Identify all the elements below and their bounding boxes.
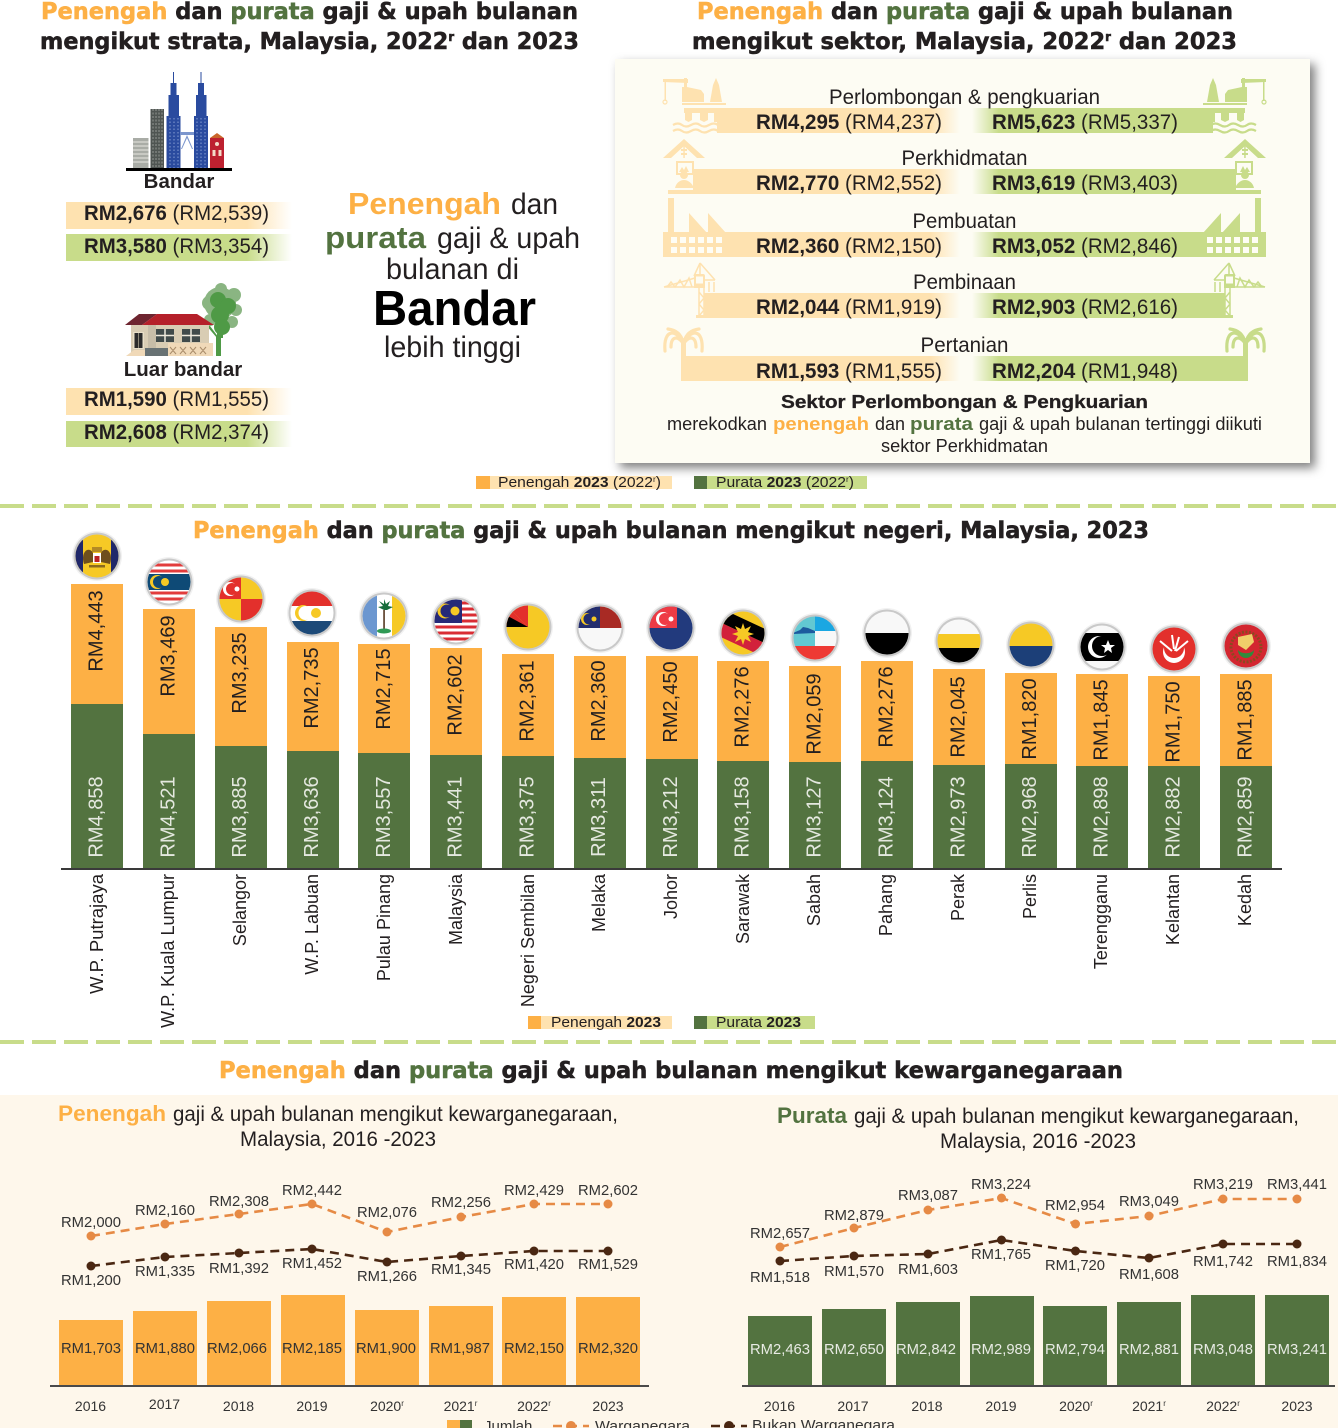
bar values: RM2,066 xyxy=(207,1341,267,1357)
callout: Bandar lebih tinggi: purata xyxy=(325,220,427,255)
row: Pembinaan: RM2,044 (RM1,919) xyxy=(756,296,942,319)
line labels: RM1,345 xyxy=(431,1262,491,1278)
years: r xyxy=(1163,1399,1166,1408)
values: penengah: RM2,450 xyxy=(660,661,682,743)
category labels xyxy=(87,873,1255,1028)
bar values: RM2,320 xyxy=(578,1341,638,1357)
bar values: RM2,842 xyxy=(896,1342,956,1358)
legend: sector: r xyxy=(846,475,849,484)
legend: sector xyxy=(476,474,867,491)
line: bukan warganegara xyxy=(86,1244,612,1270)
values: penengah: RM2,361 xyxy=(516,660,538,742)
values: purata: RM3,885 xyxy=(229,776,251,858)
values: penengah xyxy=(86,590,1256,763)
line labels: RM1,452 xyxy=(282,1256,342,1272)
line labels: RM2,256 xyxy=(431,1195,491,1211)
values: penengah: RM2,360 xyxy=(588,660,610,742)
years: r xyxy=(1237,1399,1240,1408)
bar values xyxy=(61,1341,638,1357)
icon: flag Terengganu xyxy=(1077,622,1127,672)
line: bukan warganegara xyxy=(776,1236,1302,1266)
icon: flag Kedah xyxy=(1221,621,1271,671)
line labels: RM3,441 xyxy=(1267,1177,1327,1193)
icon: flag Kelantan xyxy=(1149,624,1199,674)
row: Perkhidmatan: RM3,619 (RM3,403) xyxy=(992,172,1178,195)
callout: Bandar lebih tinggi: bulanan di xyxy=(386,253,519,286)
title: sector second line: dan 2023 xyxy=(1111,29,1237,55)
icon: rural house and tree xyxy=(125,283,242,356)
callout: Bandar lebih tinggi xyxy=(325,186,580,364)
title: sector second line: r xyxy=(1105,30,1111,44)
title: strata second line: dan 2023 xyxy=(454,29,579,55)
row: Pertanian xyxy=(665,329,1264,383)
icon: flag Selangor xyxy=(216,574,266,624)
icon: flag Sarawak xyxy=(718,608,768,658)
line labels: RM2,076 xyxy=(357,1205,417,1221)
years: 2021 xyxy=(444,1398,475,1414)
icon: flag Johor xyxy=(646,603,696,653)
line labels: RM2,308 xyxy=(209,1194,269,1210)
years: 2017 xyxy=(149,1396,180,1412)
years: 2023 xyxy=(1281,1398,1313,1414)
years: 2020 xyxy=(1059,1398,1090,1414)
bar values: RM3,241 xyxy=(1267,1342,1327,1358)
legend: sector: Penengah 2023 (2022 xyxy=(498,474,651,491)
line labels: RM2,000 xyxy=(61,1215,121,1231)
subtitle: Malaysia, 2016 -2023 xyxy=(240,1128,436,1151)
line labels: RM2,954 xyxy=(1045,1198,1105,1214)
icon: flag Perak xyxy=(934,616,984,666)
bar: Bandar purata: RM3,580 (RM3,354) xyxy=(84,235,269,258)
row: Pertanian: RM2,204 (RM1,948) xyxy=(992,360,1178,383)
bar values: RM1,900 xyxy=(356,1341,416,1357)
values: penengah: RM2,276 xyxy=(876,666,898,748)
line labels xyxy=(61,1183,638,1289)
bars: penengah xyxy=(71,584,1272,766)
bar values: RM2,185 xyxy=(282,1341,342,1357)
line: warganegara xyxy=(86,1200,612,1240)
line labels: RM2,429 xyxy=(504,1183,564,1199)
line labels: RM2,160 xyxy=(135,1203,195,1219)
icon: flag Pahang xyxy=(862,608,912,658)
years: 2021 xyxy=(1132,1398,1163,1414)
category labels: W.P. Kuala Lumpur xyxy=(158,874,178,1028)
category labels: Perak xyxy=(948,873,968,921)
line labels: RM1,200 xyxy=(61,1273,121,1289)
values: penengah: RM2,276 xyxy=(732,666,754,748)
legend: state chart: Penengah 2023 xyxy=(551,1014,661,1031)
summary text xyxy=(667,391,1262,456)
line labels: RM1,765 xyxy=(971,1247,1031,1263)
icon: flag Melaka xyxy=(575,603,625,653)
values: penengah: RM3,235 xyxy=(229,632,251,714)
row: Pembinaan: RM2,903 (RM2,616) xyxy=(992,296,1178,319)
values: purata: RM3,636 xyxy=(301,776,323,858)
row: Pembinaan: Pembinaan xyxy=(913,271,1016,294)
values: purata: RM2,973 xyxy=(948,776,970,858)
panel: sector xyxy=(615,59,1310,463)
years: 2016 xyxy=(764,1398,795,1414)
title: sector second line: mengikut sektor, Malaysia, 2022 xyxy=(692,29,1113,55)
years: 2016 xyxy=(75,1398,106,1414)
panel: penengah citizenship chart xyxy=(50,1101,649,1414)
values: penengah: RM2,715 xyxy=(373,648,395,730)
category labels: Sarawak xyxy=(733,873,753,944)
line labels: RM1,335 xyxy=(135,1264,195,1280)
category labels: Perlis xyxy=(1020,874,1040,919)
bar values: RM1,703 xyxy=(61,1341,121,1357)
line labels: RM2,657 xyxy=(750,1226,810,1242)
line labels: RM1,608 xyxy=(1119,1267,1179,1283)
years: 2020 xyxy=(370,1398,401,1414)
bar: Luar bandar purata: RM2,608 (RM2,374) xyxy=(84,421,269,444)
bars xyxy=(59,1295,640,1386)
line labels: RM1,742 xyxy=(1193,1254,1253,1270)
title: state section: Penengah dan purata gaji & upah bulanan mengikut negeri, Malaysia, 2023 xyxy=(193,518,1149,544)
bar values xyxy=(750,1342,1327,1358)
summary text: gaji & upah bulanan tertinggi diikuti xyxy=(979,414,1262,434)
category labels: Kedah xyxy=(1235,874,1255,926)
icon: city skyline xyxy=(126,72,232,171)
summary text: purata xyxy=(910,413,974,434)
line labels: RM3,087 xyxy=(898,1188,958,1204)
subtitle xyxy=(777,1103,1299,1153)
category labels: Kelantan xyxy=(1163,874,1183,945)
legend: citizenship charts xyxy=(447,1417,896,1428)
row: Pertanian: Pertanian xyxy=(920,334,1008,357)
category labels: Malaysia xyxy=(446,873,466,945)
values: purata: RM3,212 xyxy=(660,776,682,858)
callout: Bandar lebih tinggi: gaji & upah xyxy=(437,222,580,255)
line labels: RM1,570 xyxy=(824,1264,884,1280)
legend: sector: ) xyxy=(849,474,854,491)
line labels: RM1,420 xyxy=(504,1257,564,1273)
category labels: Pahang xyxy=(876,874,896,936)
values: purata: RM2,968 xyxy=(1019,776,1041,858)
values: purata: RM3,557 xyxy=(373,776,395,858)
line labels: RM3,224 xyxy=(971,1177,1031,1193)
category labels: Selangor xyxy=(230,874,250,946)
values: penengah: RM2,045 xyxy=(948,676,970,758)
label: Bandar: Bandar xyxy=(144,170,214,193)
bar values: RM2,650 xyxy=(824,1342,884,1358)
category labels: Johor xyxy=(661,874,681,919)
legend: sector: r xyxy=(653,475,656,484)
legend: sector: ) xyxy=(656,474,661,491)
values: penengah: RM2,602 xyxy=(444,654,466,736)
subtitle: Purata xyxy=(777,1103,847,1128)
years: r xyxy=(475,1399,478,1408)
line labels: RM2,442 xyxy=(282,1183,342,1199)
row: Perkhidmatan: RM2,770 (RM2,552) xyxy=(756,172,942,195)
values: penengah: RM1,820 xyxy=(1019,678,1041,760)
row: Pembuatan: RM2,360 (RM2,150) xyxy=(756,235,942,258)
bar: Luar bandar penengah: RM1,590 (RM1,555) xyxy=(84,388,269,411)
values: purata: RM4,858 xyxy=(86,776,108,858)
line labels: RM1,392 xyxy=(209,1261,269,1277)
values: penengah: RM3,469 xyxy=(158,615,180,697)
values: purata: RM2,898 xyxy=(1090,776,1112,858)
subtitle: gaji & upah bulanan mengikut kewarganegaraan, xyxy=(854,1105,1299,1128)
years: 2019 xyxy=(296,1398,328,1414)
values: penengah: RM1,845 xyxy=(1090,679,1112,761)
values: penengah: RM4,443 xyxy=(86,590,108,672)
icon: flag Sabah xyxy=(790,613,840,663)
line labels: RM1,834 xyxy=(1267,1254,1327,1270)
subtitle: gaji & upah bulanan mengikut kewarganegaraan, xyxy=(173,1103,618,1126)
summary text: merekodkan xyxy=(667,414,767,434)
category labels: Terengganu xyxy=(1091,874,1111,969)
values: purata: RM3,375 xyxy=(516,776,538,858)
row: Perlombongan: Perlombongan & pengkuarian xyxy=(829,86,1100,109)
values: purata: RM2,882 xyxy=(1162,776,1184,858)
years: 2019 xyxy=(985,1398,1017,1414)
icon: flag Labuan xyxy=(287,588,337,638)
values: penengah: RM2,059 xyxy=(804,673,826,755)
bar: Bandar penengah: RM2,676 (RM2,539) xyxy=(84,202,269,225)
summary text: dan xyxy=(875,414,905,434)
line: warganegara xyxy=(776,1194,1302,1252)
line labels xyxy=(750,1177,1327,1286)
row: Perkhidmatan: Perkhidmatan xyxy=(902,147,1028,170)
summary text: Sektor Perlombongan & Pengkuarian xyxy=(781,391,1148,412)
years: r xyxy=(401,1399,404,1408)
callout: Bandar lebih tinggi: Bandar xyxy=(373,282,536,336)
summary text: sektor Perkhidmatan xyxy=(881,436,1048,456)
line labels: RM2,879 xyxy=(824,1208,884,1224)
row: Pembuatan: RM3,052 (RM2,846) xyxy=(992,235,1178,258)
bar values: RM2,881 xyxy=(1119,1342,1179,1358)
chart: stacked bars by state xyxy=(61,584,1282,1028)
row: Perkhidmatan xyxy=(663,139,1266,195)
years: 2017 xyxy=(837,1398,869,1414)
legend: sector: Purata 2023 (2022 xyxy=(716,474,844,491)
subtitle xyxy=(58,1101,618,1151)
values: purata: RM3,311 xyxy=(588,777,610,857)
callout: Bandar lebih tinggi: Penengah xyxy=(348,186,501,221)
line labels: RM1,266 xyxy=(357,1269,417,1285)
years xyxy=(75,1396,624,1414)
values: purata: RM3,124 xyxy=(876,776,898,858)
values: purata: RM3,441 xyxy=(444,776,466,858)
line labels: RM1,603 xyxy=(898,1262,958,1278)
line labels: RM2,602 xyxy=(578,1183,638,1199)
years: 2022 xyxy=(517,1398,548,1414)
category labels: Negeri Sembilan xyxy=(518,874,538,1007)
category labels: Melaka xyxy=(589,873,609,932)
title: strata second line: r xyxy=(448,30,454,44)
icon: flag Negeri Sembilan xyxy=(503,602,553,652)
legend: state chart: Purata 2023 xyxy=(716,1014,801,1031)
bar values: RM2,794 xyxy=(1045,1342,1105,1358)
row: Perlombongan: RM4,295 (RM4,237) xyxy=(756,111,942,134)
values: purata: RM2,859 xyxy=(1234,776,1256,858)
subtitle: Penengah xyxy=(58,1101,166,1126)
line labels: RM1,518 xyxy=(750,1270,810,1286)
bar values: RM2,463 xyxy=(750,1342,810,1358)
years: 2023 xyxy=(592,1398,624,1414)
values: purata xyxy=(86,776,1256,858)
line labels: RM3,049 xyxy=(1119,1194,1179,1210)
title: citizenship section: Penengah dan purata gaji & upah bulanan mengikut kewarganegaraan xyxy=(219,1058,1123,1084)
years: 2018 xyxy=(911,1398,943,1414)
category labels: W.P. Labuan xyxy=(302,874,322,975)
title: strata second line: mengikut strata, Malaysia, 2022 xyxy=(40,29,460,55)
bars: purata xyxy=(71,704,1272,869)
callout: Bandar lebih tinggi: lebih tinggi xyxy=(384,331,521,364)
icon: flag Putrajaya xyxy=(72,531,122,581)
label: Luar bandar: Luar bandar xyxy=(124,358,242,381)
values: purata: RM3,158 xyxy=(732,776,754,858)
category labels: Pulau Pinang xyxy=(374,874,394,981)
values: purata: RM4,521 xyxy=(158,776,180,858)
panel: purata citizenship chart xyxy=(742,1103,1335,1414)
bar values: RM2,989 xyxy=(971,1342,1031,1358)
line labels: RM1,720 xyxy=(1045,1258,1105,1274)
row: Pembinaan xyxy=(664,263,1265,319)
years xyxy=(764,1398,1313,1414)
icon: flag Kuala Lumpur xyxy=(144,557,194,607)
icon: flag Perlis xyxy=(1006,620,1056,670)
callout: Bandar lebih tinggi: dan xyxy=(511,188,558,221)
years: r xyxy=(548,1399,551,1408)
line labels: RM1,529 xyxy=(578,1257,638,1273)
values: purata: RM3,127 xyxy=(804,776,826,858)
category labels: W.P. Putrajaya xyxy=(87,873,107,994)
values: penengah: RM1,885 xyxy=(1234,679,1256,761)
bars xyxy=(748,1295,1329,1386)
bar values: RM2,150 xyxy=(504,1341,564,1357)
bar values: RM3,048 xyxy=(1193,1342,1253,1358)
bar values: RM1,880 xyxy=(135,1341,195,1357)
icon: flag Malaysia xyxy=(431,596,481,646)
values: penengah: RM1,750 xyxy=(1162,681,1184,763)
summary text: penengah xyxy=(773,413,869,434)
category labels: Sabah xyxy=(804,874,824,926)
row: Pembuatan: Pembuatan xyxy=(912,210,1016,233)
values: penengah: RM2,735 xyxy=(301,647,323,729)
legend: state chart xyxy=(528,1014,815,1031)
row: Pertanian: RM1,593 (RM1,555) xyxy=(756,360,942,383)
years: 2022 xyxy=(1206,1398,1237,1414)
row: Pembuatan xyxy=(663,198,1266,258)
years: 2018 xyxy=(223,1398,254,1414)
line labels: RM3,219 xyxy=(1193,1177,1253,1193)
years: r xyxy=(1090,1399,1093,1408)
icon: flag Pulau Pinang xyxy=(359,591,409,641)
row: Perlombongan: RM5,623 (RM5,337) xyxy=(992,111,1178,134)
row: Perlombongan xyxy=(663,78,1266,134)
subtitle: Malaysia, 2016 -2023 xyxy=(940,1130,1136,1153)
bar values: RM1,987 xyxy=(430,1341,490,1357)
